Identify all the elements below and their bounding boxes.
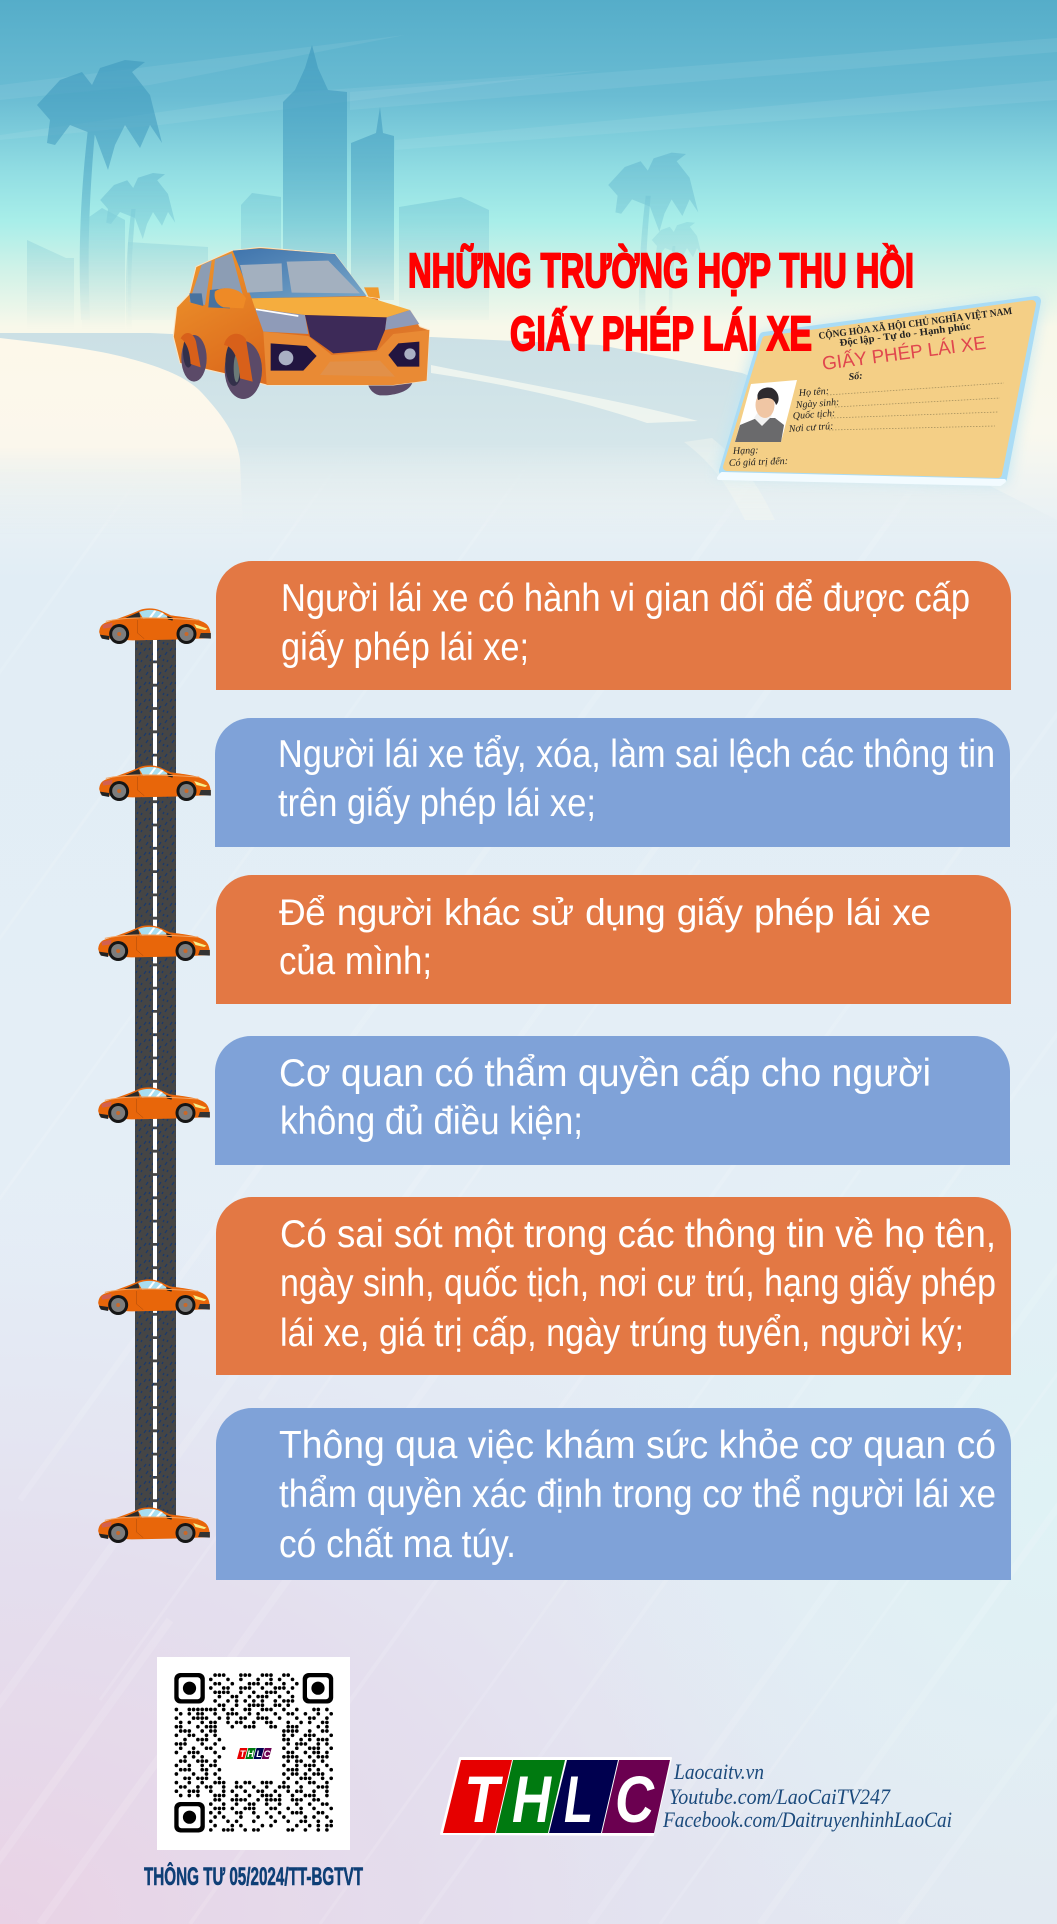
channel links: Youtube.com/LaoCaiTV247 [669, 1784, 891, 1809]
timeline car 6 [98, 1507, 210, 1543]
panel: item 1 [216, 561, 1011, 690]
card fields: Quốc tịch: [792, 408, 836, 422]
QR centre logo: H [247, 1749, 254, 1759]
panel: item 5 [216, 1197, 1011, 1375]
title [408, 243, 914, 361]
road markings [431, 365, 698, 423]
panel: item 4: không đủ điều kiện; [280, 1100, 583, 1143]
panel: item 1: Người lái xe có hành vi gian dối để được cấp [281, 577, 970, 620]
palm: right [608, 152, 698, 310]
card heading: CỘNG HÒA XÃ HỘI CHỦ NGHĨA VIỆT NAM [818, 304, 1013, 342]
side windows [189, 253, 243, 307]
panel: item 5: Có sai sót một trong các thông tin về họ tên, [280, 1213, 996, 1256]
building: low blocks [27, 193, 489, 308]
building: tower [283, 46, 347, 269]
panel: item 3: của mình; [279, 940, 432, 983]
timeline car 4 [98, 1087, 210, 1123]
card fields: Họ tên: [797, 386, 829, 399]
QR centre logo: C [264, 1749, 271, 1759]
timeline car 5 [98, 1279, 210, 1315]
panel: item 2: trên giấy phép lái xe; [278, 782, 596, 825]
panel: item 6 [216, 1408, 1011, 1580]
card fields: Ngày sinh: [794, 397, 840, 411]
panel: item 1: giấy phép lái xe; [281, 626, 529, 669]
sky clouds [0, 35, 1057, 150]
timeline car 2 [99, 765, 211, 801]
THLC logo [441, 1758, 671, 1836]
grille [305, 315, 387, 353]
card fields [729, 371, 863, 469]
panel: item 2 [215, 718, 1010, 847]
card fields: Có giá trị đến: [729, 456, 788, 469]
QR caption: THÔNG TƯ 05/2024/TT-BGTVT [144, 1861, 363, 1891]
road in header [0, 333, 1057, 535]
driving licence card: GIẤY PHÉP LÁI XE [821, 332, 987, 375]
header car illustration [173, 247, 429, 399]
panel: item 6: thẩm quyền xác định trong cơ thể người lái xe [279, 1473, 996, 1516]
city skyline and palms [27, 45, 702, 340]
channel links: Facebook.com/DaitruyenhinhLaoCai [662, 1807, 952, 1832]
bumper [263, 330, 429, 385]
rear wheel [181, 335, 207, 382]
card fields: Hạng: [732, 445, 759, 457]
mirror [215, 288, 246, 308]
THLC logo: C [615, 1762, 655, 1836]
portrait photo [735, 380, 797, 442]
palm: small left [100, 173, 175, 312]
right wheel [367, 382, 413, 395]
panel: item 3 [216, 875, 1011, 1004]
timeline car 1 [99, 608, 211, 644]
card fields: Nơi cư trú: [787, 421, 834, 435]
driving licence card: Độc lập - Tự do - Hạnh phúc [839, 321, 972, 349]
hood [252, 297, 410, 317]
building: second tower [351, 107, 394, 300]
title: GIẤY PHÉP LÁI XE [510, 307, 812, 361]
QR code [157, 1657, 350, 1850]
wheel arches [181, 333, 253, 382]
timeline road [135, 638, 176, 1518]
panel: item 4: Cơ quan có thẩm quyền cấp cho người [279, 1052, 931, 1095]
THLC logo: H [512, 1762, 552, 1836]
driving licence card [717, 296, 1042, 484]
channel links: Laocaitv.vn [673, 1759, 764, 1784]
QR centre logo: L [256, 1749, 262, 1759]
QR finder patterns [174, 1673, 333, 1832]
cream roadside [0, 338, 243, 535]
palm: small right [652, 222, 701, 298]
panel: item 6: Thông qua việc khám sức khỏe cơ quan có [279, 1424, 996, 1467]
timeline car 3 [98, 925, 210, 961]
panel: item 4 [215, 1036, 1010, 1165]
QR centre logo [237, 1748, 272, 1759]
panel: item 3: Để người khác sử dụng giấy phép lái xe [279, 892, 931, 933]
front wheel [225, 341, 262, 399]
THLC logo: L [564, 1762, 593, 1836]
palm: large left [37, 60, 162, 320]
windshield [233, 248, 367, 298]
panel: item 6: có chất ma túy. [279, 1523, 516, 1566]
fog lights [271, 343, 317, 371]
channel links [662, 1759, 952, 1832]
THLC logo: T [464, 1762, 503, 1836]
car body [173, 247, 429, 385]
background streaks [0, 420, 1057, 1924]
headlights [255, 308, 308, 334]
QR data modules [176, 1675, 336, 1830]
QR centre logo: T [240, 1749, 247, 1759]
panel: item 5: lái xe, giá trị cấp, ngày trúng tuyển, người ký; [280, 1312, 964, 1355]
card fields: Số: [848, 371, 863, 383]
